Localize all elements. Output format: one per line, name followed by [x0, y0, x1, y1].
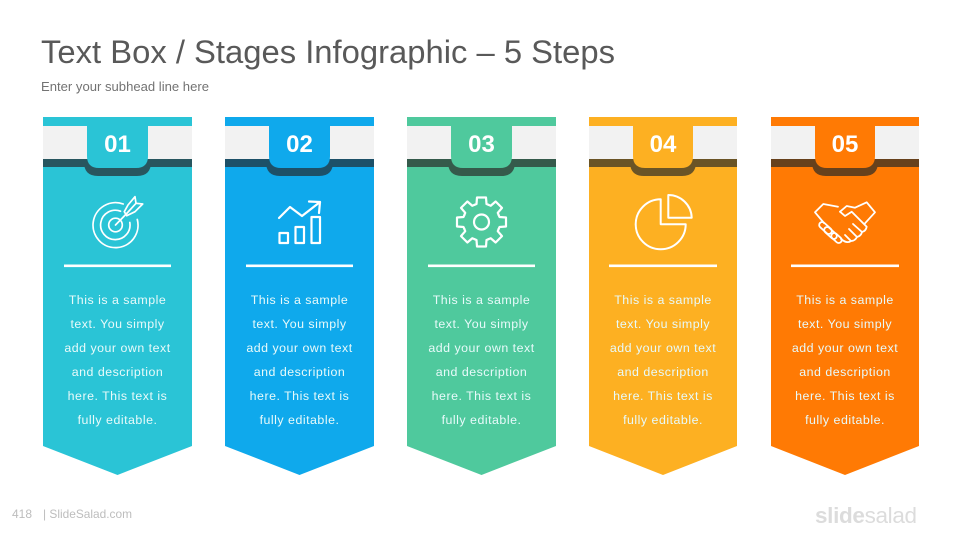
divider line	[791, 264, 899, 267]
icon: gear	[457, 198, 506, 246]
text block: fully editable.	[260, 413, 339, 427]
icon: pie chart	[636, 195, 692, 249]
text block: text. You simply	[798, 317, 892, 331]
subtitle: Enter your subhead line here	[41, 80, 209, 94]
text block: add your own text	[428, 341, 535, 355]
icon: target with arrow	[93, 197, 143, 248]
number tab	[451, 117, 512, 168]
text block: fully editable.	[442, 413, 521, 427]
text block: text. You simply	[70, 317, 165, 331]
text block: here. This text is	[613, 389, 713, 403]
text block: fully editable.	[805, 413, 885, 427]
text block: text. You simply	[434, 317, 529, 331]
divider line	[428, 264, 535, 267]
text block: here. This text is	[250, 389, 349, 403]
text block: This is a sample	[251, 293, 348, 307]
text block: fully editable.	[78, 413, 157, 427]
panel: step 04	[589, 117, 737, 475]
number tab	[87, 117, 148, 168]
number tab	[269, 117, 330, 168]
text block: text. You simply	[616, 317, 710, 331]
text block: and description	[617, 365, 709, 379]
text block: and description	[72, 365, 163, 379]
number tab	[633, 117, 693, 168]
icon: growth chart	[279, 202, 320, 243]
text block: fully editable.	[623, 413, 703, 427]
text block: here. This text is	[432, 389, 531, 403]
card body	[589, 117, 737, 475]
text block: add your own text	[792, 341, 898, 355]
card body	[407, 117, 556, 475]
text block: add your own text	[64, 341, 171, 355]
number tab: 03	[468, 131, 495, 158]
text block: and description	[436, 365, 527, 379]
logo: slidesalad: slidesalad	[815, 503, 917, 528]
text block: add your own text	[610, 341, 716, 355]
icon: handshake	[815, 202, 875, 244]
text block: here. This text is	[795, 389, 895, 403]
text block: This is a sample	[796, 293, 894, 307]
panel: step 01	[43, 117, 192, 475]
divider line	[246, 264, 353, 267]
page number: 418	[12, 507, 32, 521]
title: Text Box / Stages Infographic – 5 Steps	[41, 34, 615, 70]
card body	[771, 117, 919, 475]
number tab: 02	[286, 131, 313, 158]
text block: This is a sample	[433, 293, 530, 307]
text block: text. You simply	[252, 317, 347, 331]
panel: step 05	[771, 117, 919, 475]
number tab: 05	[832, 131, 858, 158]
card body	[43, 117, 192, 475]
text block: and description	[799, 365, 891, 379]
text block: This is a sample	[69, 293, 166, 307]
number tab: 01	[104, 131, 131, 158]
divider line	[64, 264, 171, 267]
text block: This is a sample	[614, 293, 712, 307]
panel: step 03	[407, 117, 556, 475]
text block: add your own text	[246, 341, 353, 355]
footer source: | SlideSalad.com	[43, 507, 132, 521]
divider line	[609, 264, 717, 267]
card body	[225, 117, 374, 475]
number tab	[815, 117, 875, 168]
number tab: 04	[650, 131, 677, 158]
text block: and description	[254, 365, 345, 379]
text block: here. This text is	[68, 389, 167, 403]
panel: step 02	[225, 117, 374, 475]
